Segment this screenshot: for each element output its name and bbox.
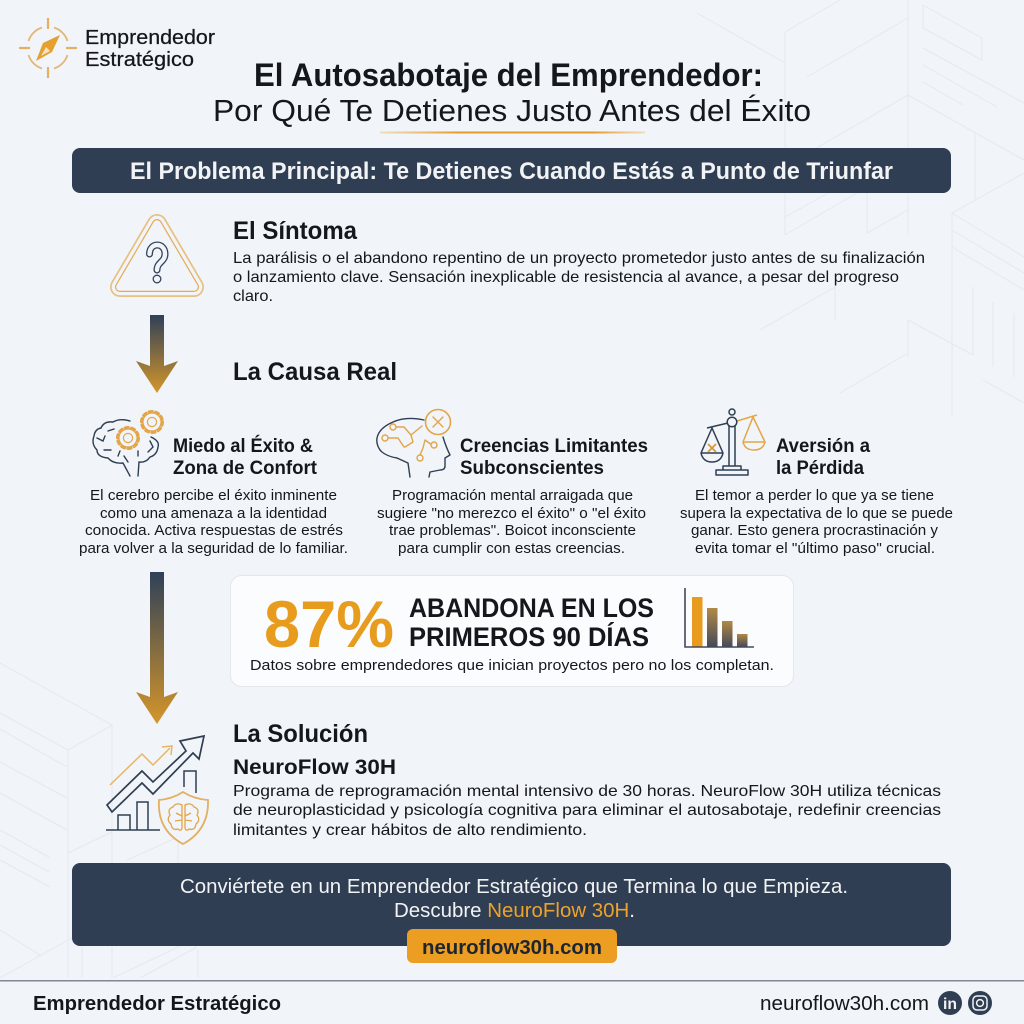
panel: statistic bbox=[230, 576, 794, 686]
icon: compass bbox=[19, 18, 77, 78]
column heading bbox=[173, 434, 317, 479]
stat label bbox=[409, 593, 654, 652]
call to action panel bbox=[72, 863, 951, 963]
button: website: neuroflow30h.com bbox=[422, 937, 602, 959]
call to action panel: Conviértete en un Emprendedor Estratégico que Termina lo que Empieza. bbox=[180, 876, 848, 898]
section: symptom text bbox=[233, 217, 925, 305]
logo wordmark: Emprendedor bbox=[85, 26, 215, 49]
banner: main problem bbox=[72, 148, 951, 193]
column text: para volver a la seguridad de lo familiar. bbox=[79, 541, 348, 557]
section: solution text: limitantes y crear hábitos de alto rendimiento. bbox=[233, 822, 587, 839]
footer: neuroflow30h.com bbox=[760, 993, 929, 1015]
section: solution text: de neuroplasticidad y psicología cognitiva para eliminar el autosabotaje, redefinir creencias bbox=[233, 802, 941, 819]
bar chart bbox=[685, 588, 754, 647]
section: solution text: NeuroFlow 30H bbox=[233, 756, 396, 779]
banner: main problem: El Problema Principal: Te Detienes Cuando Estás a Punto de Triunfar bbox=[130, 158, 893, 185]
title: El Autosabotaje del Emprendedor: bbox=[254, 57, 763, 93]
column text bbox=[680, 488, 953, 557]
icon: instagram bbox=[968, 991, 992, 1015]
section: solution text: La Solución bbox=[233, 720, 368, 748]
icon: scales bbox=[701, 409, 765, 475]
icon: growth chart with brain shield bbox=[106, 736, 208, 844]
title: Por Qué Te Detienes Justo Antes del Éxito bbox=[213, 93, 811, 128]
column heading bbox=[460, 435, 648, 479]
stat label: ABANDONA EN LOS bbox=[409, 593, 654, 623]
panel: loss aversion bbox=[680, 409, 953, 557]
stat label: PRIMEROS 90 DÍAS bbox=[409, 621, 649, 652]
column text: sugiere "no merezco el éxito" o "el éxito bbox=[377, 506, 646, 522]
section: symptom text: o lanzamiento clave. Sensación inexplicable de resistencia al avance, a pesar del progreso bbox=[233, 269, 899, 286]
heading: real cause: La Causa Real bbox=[233, 358, 397, 386]
arrow: cause to solution bbox=[136, 572, 178, 724]
panel: limiting beliefs bbox=[377, 410, 648, 557]
footer: Emprendedor Estratégico bbox=[33, 993, 281, 1015]
panel: fear of success bbox=[79, 412, 348, 557]
column heading: la Pérdida bbox=[776, 457, 864, 479]
column heading: Subconscientes bbox=[460, 457, 604, 479]
column text: Programación mental arraigada que bbox=[392, 488, 633, 504]
arrow: symptom to cause bbox=[136, 315, 178, 393]
column heading: Zona de Confort bbox=[173, 457, 317, 479]
column text: trae problemas". Boicot inconsciente bbox=[389, 523, 636, 539]
icon: head with circuit bbox=[377, 410, 450, 477]
column heading: Miedo al Éxito & bbox=[173, 434, 313, 457]
icon: warning triangle bbox=[120, 224, 194, 287]
stat note: Datos sobre emprendedores que inician proyectos pero no los completan. bbox=[250, 657, 774, 674]
logo bbox=[19, 18, 215, 78]
section: symptom text: La parálisis o el abandono repentino de un proyecto prometedor justo antes de su finalización bbox=[233, 250, 925, 267]
section: symptom text: claro. bbox=[233, 288, 273, 305]
column heading: Aversión a bbox=[776, 435, 870, 457]
column heading: Creencias Limitantes bbox=[460, 435, 648, 457]
column text: evita tomar el "último paso" crucial. bbox=[695, 541, 935, 557]
column text: ganar. Esto genera procrastinación y bbox=[691, 523, 939, 539]
column text: El cerebro percibe el éxito inminente bbox=[90, 488, 337, 504]
column text bbox=[79, 488, 348, 557]
footer bbox=[0, 980, 1024, 1015]
title bbox=[213, 57, 811, 134]
section: solution text: Programa de reprogramación mental intensivo de 30 horas. NeuroFlow 30H utiliza técnicas bbox=[233, 783, 941, 800]
column text bbox=[377, 488, 646, 557]
button: website bbox=[407, 929, 617, 963]
stat number: 87% bbox=[264, 587, 394, 661]
column text: conocida. Activa respuestas de estrés bbox=[85, 523, 343, 539]
logo wordmark bbox=[85, 26, 215, 71]
icon: brain with gears bbox=[93, 412, 162, 476]
section: solution text bbox=[233, 720, 941, 839]
icon: linkedin: in bbox=[943, 996, 957, 1013]
section: symptom text: El Síntoma bbox=[233, 217, 358, 245]
column text: supera la expectativa de lo que se puede bbox=[680, 506, 953, 522]
call to action panel: Descubre NeuroFlow 30H. bbox=[394, 900, 635, 922]
column text: El temor a perder lo que ya se tiene bbox=[695, 488, 934, 504]
column text: para cumplir con estas creencias. bbox=[398, 541, 625, 557]
icon: linkedin bbox=[938, 991, 962, 1015]
column text: como una amenaza a la identidad bbox=[100, 506, 327, 522]
logo wordmark: Estratégico bbox=[85, 48, 194, 71]
column heading bbox=[776, 435, 870, 479]
